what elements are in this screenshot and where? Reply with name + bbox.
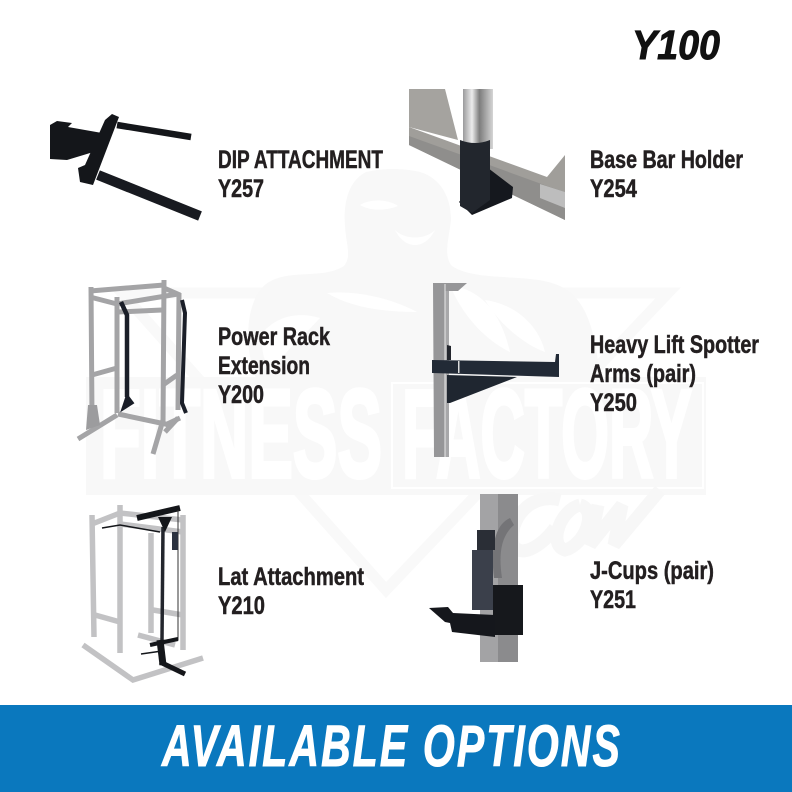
icon: power rack with extension [78, 280, 186, 454]
banner: available options [0, 705, 792, 792]
label: heavy lift spotter arms: Arms (pair) [590, 360, 696, 388]
icon: dip attachment photo [50, 114, 200, 216]
option: base bar holder [409, 89, 743, 220]
label: heavy lift spotter arms: Y250 [590, 389, 637, 417]
label: lat attachment: Lat Attachment [218, 563, 365, 591]
watermark logo [86, 169, 706, 590]
icon: rack with lat attachment [83, 505, 203, 680]
icon: spotter arm photo [432, 283, 559, 457]
icon: base bar holder photo [409, 89, 565, 220]
label: dip attachment: DIP ATTACHMENT [218, 146, 383, 174]
label: j-cups: J-Cups (pair) [590, 557, 714, 585]
option: lat attachment [83, 505, 365, 680]
model number title: Y100 [632, 22, 720, 68]
option: power rack extension [78, 280, 330, 454]
label: power rack extension: Extension [218, 352, 310, 380]
label: power rack extension: Y200 [218, 381, 264, 409]
label: j-cups: Y251 [590, 586, 636, 614]
option: dip attachment [50, 114, 383, 216]
label: lat attachment: Y210 [218, 592, 265, 620]
watermark logo: FITNESS [100, 365, 382, 504]
icon: j-cup photo [429, 494, 523, 662]
label: dip attachment: Y257 [218, 175, 264, 203]
label: base bar holder: Base Bar Holder [590, 146, 743, 174]
label: base bar holder: Y254 [590, 175, 637, 203]
option: j-cups [429, 494, 714, 662]
label: power rack extension: Power Rack [218, 323, 330, 351]
option: heavy lift spotter arms [432, 283, 759, 457]
